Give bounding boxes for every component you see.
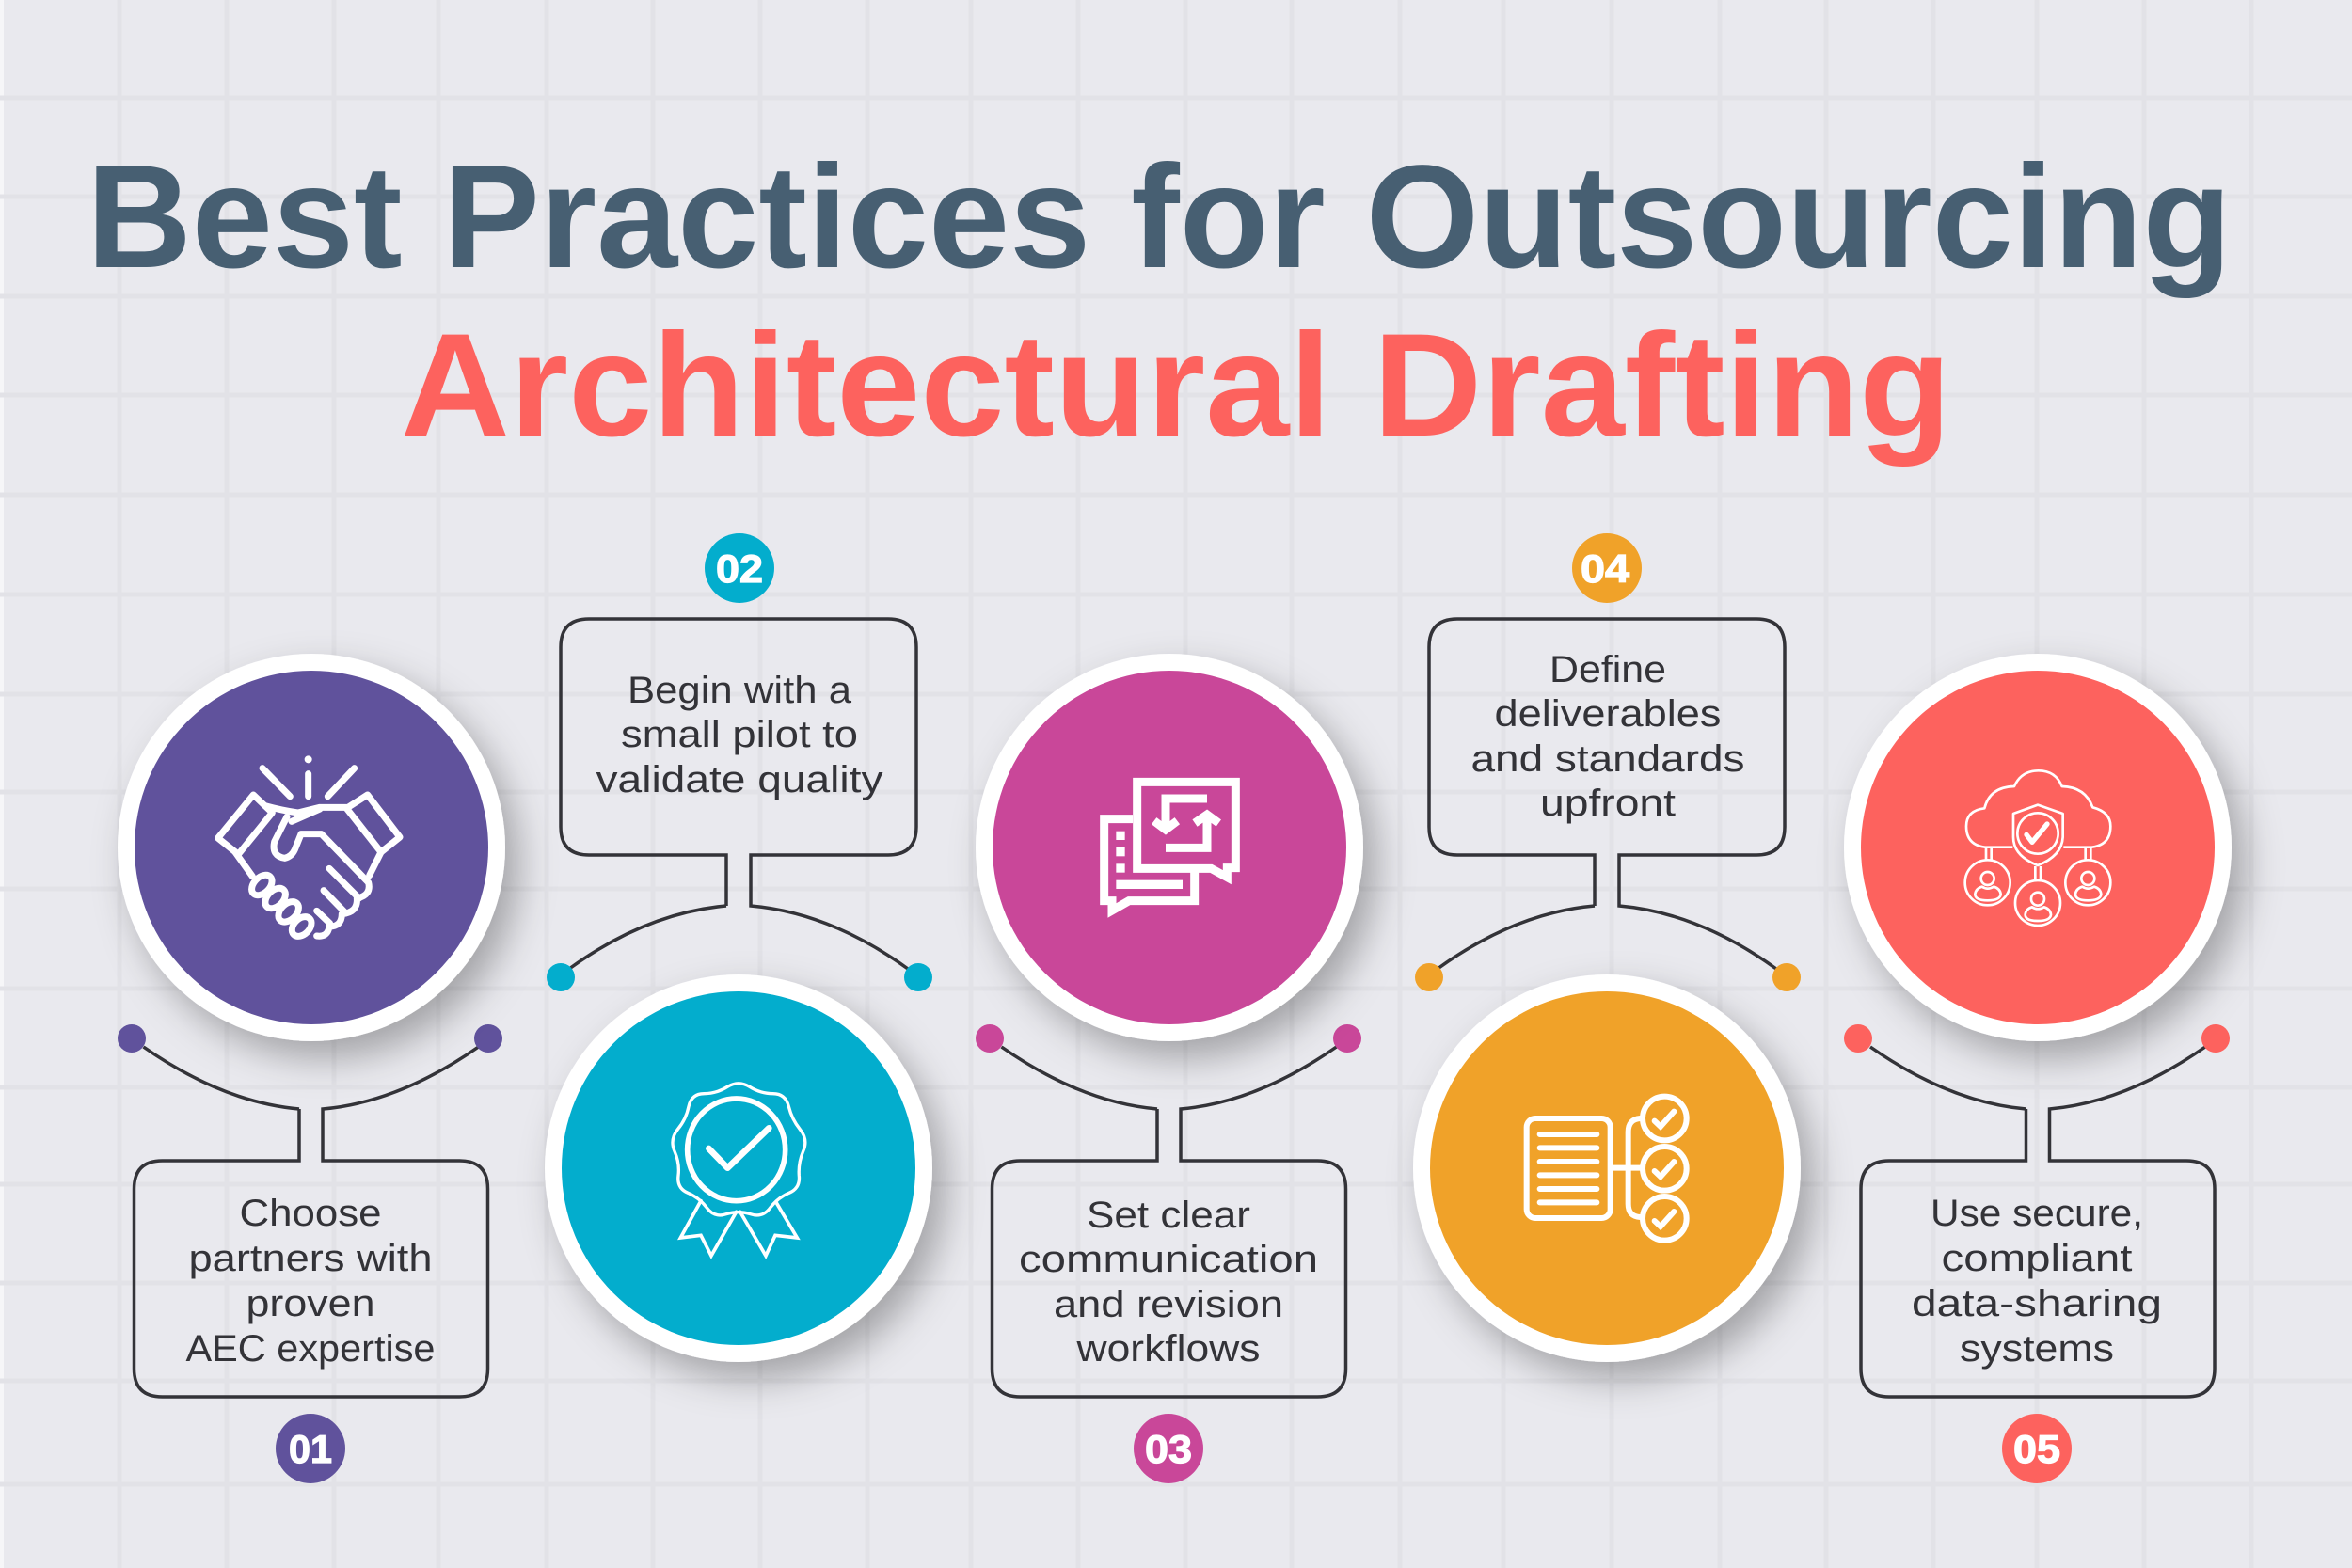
icon: document with checklist [1527,1097,1687,1241]
connector dots [1415,963,1801,991]
connector dots [1844,1024,2230,1053]
description text: proven [246,1283,374,1324]
panel: step 04 [1413,533,1801,1362]
panel: step 05 [1844,654,2232,1483]
description text [186,1193,435,1370]
description text: workflows [1075,1328,1261,1370]
description text: partners with [188,1238,433,1279]
number badge [705,533,774,603]
circle [545,974,932,1362]
description text: validate quality [596,759,882,800]
number badge [276,1414,345,1483]
description text [1471,649,1744,824]
number badge: 03 [1145,1427,1192,1471]
description text: AEC expertise [186,1328,435,1370]
description text: systems [1960,1328,2114,1370]
panel: step 01 [118,654,505,1483]
number badge [2002,1414,2072,1483]
description text: Set clear [1087,1195,1250,1236]
description text [596,670,882,800]
number badge [1572,533,1642,603]
connector dots [118,1024,502,1053]
description text: data-sharing [1912,1283,2162,1324]
callout connector and box [992,1047,1345,1397]
description text: Use secure, [1931,1193,2143,1234]
description text: Begin with a [628,670,852,711]
title line 1: Best Practices for Outsourcing [87,135,2232,299]
icon: award badge with check [673,1084,805,1256]
circle [1844,654,2232,1041]
callout connector and box [561,619,916,969]
number badge: 05 [2013,1427,2060,1471]
number badge: 04 [1581,546,1630,591]
icon: handshake [218,755,400,940]
title line 2: Architectural Drafting [401,304,1951,467]
connector dots [547,963,932,991]
panel: step 03 [976,654,1363,1483]
circle [1413,974,1801,1362]
number badge: 01 [289,1427,332,1471]
icon: secure cloud with users [1965,770,2110,926]
number badge [1134,1414,1203,1483]
circle [118,654,505,1041]
description text: upfront [1540,783,1676,824]
callout connector and box [134,1047,487,1397]
circle [976,654,1363,1041]
description text: and revision [1054,1284,1283,1325]
description text: compliant [1942,1238,2132,1279]
callout connector and box [1429,619,1785,969]
description text: communication [1019,1239,1318,1280]
number badge: 02 [716,546,763,591]
connector dots [976,1024,1361,1053]
panel: step 02 [545,533,932,1362]
description text [1912,1193,2162,1370]
description text: Choose [239,1193,382,1234]
title [87,135,2232,467]
description text: Define [1549,649,1666,690]
description text: deliverables [1494,693,1722,735]
description text [1019,1195,1318,1370]
icon: chat bubbles with exchange arrows [1104,782,1235,911]
callout connector and box [1861,1047,2215,1397]
description text: small pilot to [621,714,858,755]
description text: and standards [1471,738,1744,780]
